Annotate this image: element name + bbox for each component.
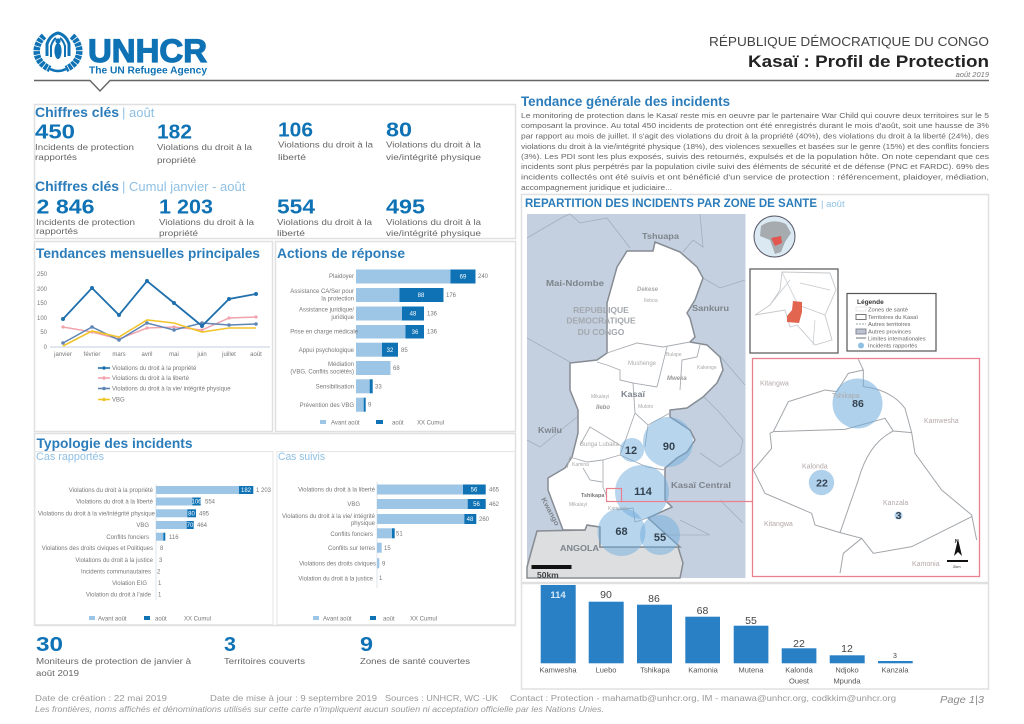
legend: cas rapportés: [89, 616, 211, 622]
bar chart: cas suivis: 56: [473, 502, 480, 508]
line chart: mai: [169, 352, 179, 358]
subheading: cas suivis: Cas suivis: [278, 451, 325, 463]
legend items: Autres territoires: [868, 322, 911, 328]
bar chart: cas rapportés: Incidents communautaires: [81, 570, 151, 576]
values: 3: [893, 653, 897, 660]
stat: 450: Incidents de protection: [35, 142, 134, 152]
bar chart: cas suivis: 260: [479, 517, 490, 523]
map: territory labels: Dekese: [637, 287, 659, 293]
line chart: 100: [37, 316, 48, 322]
map: scale bar: [532, 565, 572, 580]
heading: actions: Actions de réponse: [277, 245, 405, 261]
chart legend: Violations du droit à la liberté: [112, 376, 190, 382]
zone names: Kamwesha: [539, 666, 577, 674]
legend: actions: XX Cumul: [417, 420, 444, 426]
panel: chiffres clés: [34, 104, 516, 238]
stat: 182: Violations du droit à la: [157, 142, 252, 152]
map: bubble values: 114: [634, 486, 653, 498]
title block: [709, 34, 990, 79]
stat: 30: Moniteurs de protection de janvier à: [36, 656, 191, 666]
map: territory labels: Mweka: [667, 376, 687, 382]
panel: tendances mensuelles: [34, 242, 272, 432]
bar chart: cas suivis: Violations des droits civiques: [299, 562, 376, 568]
legend: cas suivis: XX Cumul: [410, 616, 437, 622]
map: province labels: Kwango: [539, 497, 560, 527]
panel: typologie des incidents: [34, 434, 516, 626]
map: country label: REPUBLIQUE: [573, 305, 629, 315]
map: province labels: Kasaï: [621, 389, 646, 399]
bar chart: cas rapportés: Violation du droit à l'aide: [86, 592, 152, 598]
stacked bar chart: (VBG, Conflits sociétés): [290, 370, 354, 376]
zone names: Mpunda: [833, 676, 861, 686]
logo wordmark: UNHCR: [88, 33, 207, 69]
map: province labels: Kasaï Central: [671, 480, 731, 490]
stat: 9: Zones de santé couvertes: [360, 656, 470, 666]
map: bubble values: 12: [625, 445, 637, 457]
map: location box and connector: [606, 488, 752, 502]
inset: zone labels: Kanzala: [883, 500, 908, 507]
legend: cas suivis: août: [383, 616, 395, 622]
map: territory labels: Mikalayi: [569, 502, 587, 508]
stat: 554: liberté: [277, 228, 305, 238]
stat: 3: Territoires couverts: [224, 656, 305, 666]
legend: cas rapportés: août: [155, 616, 167, 622]
bar chart: cas rapportés: Violations des droits civiques et Politiques: [42, 546, 153, 552]
stat: 450: 450: [35, 122, 75, 144]
map legend: [847, 294, 936, 351]
zone names: Kalonda: [785, 666, 814, 674]
map: country label: DU CONGO: [578, 327, 625, 337]
legend items: Incidents rapportés: [868, 344, 917, 350]
bar chart: cas rapportés: Violations du droit à la vie/intégrité physique: [38, 512, 156, 518]
map: territory labels: Mikalayi: [591, 394, 609, 400]
stat: 80: Violations du droit à la: [386, 140, 481, 150]
bar chart: cas suivis: 465: [489, 488, 500, 494]
stat: 2 846: 2 846: [36, 196, 94, 218]
stacked bar chart: 240: [478, 274, 489, 280]
heading: chiffres clés août: Chiffres clés| août: [35, 104, 155, 120]
bar chart: cas rapportés: 80: [188, 512, 195, 518]
paragraph: accompagnement juridique et judiciaire...: [521, 183, 672, 192]
bottom stats: [36, 634, 470, 678]
stat: 106: liberté: [278, 152, 306, 162]
stacked bar chart: Assistance juridique/: [299, 308, 354, 314]
header: UNHCR logo: [37, 33, 207, 76]
stat: 106: [278, 120, 373, 162]
stacked bar chart: Prise en charge médicale: [290, 330, 359, 336]
bar chart: cas suivis: 48: [467, 517, 474, 523]
legend: actions: [320, 420, 444, 426]
bar chart: cas rapportés: 495: [199, 512, 210, 518]
zone names: Ouest: [789, 676, 810, 686]
stacked bar chart: 85: [401, 348, 408, 354]
stat: 106: 106: [278, 120, 313, 142]
bar chart: cas suivis: VBG: [347, 502, 360, 508]
map: territory labels: Tshikapa: [581, 493, 605, 499]
legend: actions: août: [392, 420, 404, 426]
map: territory labels: Mushenge: [628, 361, 657, 367]
stat: 3: 3: [224, 634, 236, 656]
stacked bar chart: Assistance CA/Ser pour: [290, 289, 354, 295]
stacked bar chart: la protection: [321, 296, 354, 302]
values: 55: [745, 615, 757, 627]
line chart: 0: [44, 345, 48, 351]
map: province labels: [538, 231, 731, 553]
bar chart: cas suivis: 9: [382, 562, 386, 568]
zone names: Kamonia: [688, 666, 719, 674]
map: province borders outside Kasaï: [527, 214, 745, 535]
stat: 30: 30: [36, 634, 63, 656]
inset: zone labels: Kalonda: [802, 464, 828, 470]
stat: 182: [157, 122, 252, 165]
chart legend: VBG: [112, 398, 125, 404]
stat: 2 846: [36, 196, 135, 236]
stat: 2 846: rapportés: [36, 226, 78, 236]
stacked bar chart: 36: [412, 330, 419, 336]
bar chart: cas rapportés: 106: [191, 500, 202, 506]
map: province labels: Tshuapa: [642, 231, 679, 241]
legend: cas rapportés: XX Cumul: [184, 616, 211, 622]
map: province labels: ANGOLA: [560, 543, 599, 553]
page number: Page 1|3: [940, 694, 984, 706]
map: bubble values: 68: [615, 526, 628, 538]
heading: tendance générale: Tendance générale des incidents: [521, 93, 730, 109]
map: territory labels: Kakenge: [697, 365, 717, 371]
values: 114: [550, 590, 566, 601]
stacked bar chart: juridique: [330, 315, 355, 321]
map: country label: [566, 305, 636, 337]
footer dates and sources: [35, 693, 896, 703]
bar chart: cas rapportés: 3: [159, 558, 163, 564]
line chart: 150: [37, 301, 48, 307]
bar chart: cas suivis: Violation du droit à la justice: [298, 576, 374, 582]
text block: tendance générale: [521, 93, 989, 192]
line chart: janvier: [53, 352, 72, 358]
map: territory labels: Ilebo: [596, 405, 610, 411]
paragraph: Le monitoring de protection dans le Kasaï reste mis en oeuvre par le partenaire War Child qui couvre deux territoires sur le 5: [521, 111, 989, 120]
paragraph: violations du droit à la vie/intégrité physique (18%), des violences sexuelles et basées sur le genre (15%) et des conflits fonciers: [521, 142, 989, 151]
map: territory labels: Mutoto: [638, 404, 654, 410]
map: bubble values: 55: [654, 532, 666, 544]
line chart: juin: [196, 352, 207, 358]
line chart: mars: [112, 352, 126, 358]
paragraph: (3%). Les PDI sont les plus exposés, suivis des retournés, expulsés et de la population hôte. On note cependant que ces: [521, 152, 989, 161]
stat: 554: Violations du droit à la: [277, 217, 372, 227]
bar chart: cas rapportés: 1: [158, 581, 162, 587]
zone names: Tshikapa: [640, 666, 671, 674]
stat: 495: vie/intégrité physique: [386, 228, 481, 238]
stacked bar chart: 48: [410, 312, 417, 318]
footer disclaimer: Les frontières, noms affichés et dénominations utilisés sur cette carte n'impliquent aucun soutien ni acceptation officielle par les Nations Unies.: [35, 704, 604, 714]
chart legend: Violations du droit à la propriété: [112, 366, 197, 372]
stat: 554: 554: [277, 196, 316, 218]
map: scale bar: 50km: [537, 570, 559, 580]
bar chart: cas rapportés: Violations du droit à la justice: [75, 558, 154, 564]
icon: UNHCR emblem: [37, 33, 79, 71]
heading: typologie: Typologie des incidents: [36, 435, 193, 451]
legend: cas rapportés: Avant août: [98, 616, 127, 622]
bar chart: cas suivis: physique: [351, 521, 376, 527]
stat: 3: [224, 634, 305, 666]
chart legend: [98, 366, 231, 404]
panel: actions de réponse: [276, 242, 516, 432]
zone names: Kanzala: [881, 666, 909, 674]
bar chart: cas rapportés: Violation EIG: [112, 581, 147, 587]
stat: 2 846: Incidents de protection: [36, 217, 135, 227]
values: 22: [793, 638, 805, 650]
bar chart: cas rapportés: Violations du droit à la propriété: [69, 488, 154, 494]
bar chart: cas suivis: Violations du droit à la liberté: [298, 488, 376, 494]
zone names: Ndjoko: [835, 666, 859, 674]
legend items: Territoires du Kasaï: [868, 315, 918, 321]
map: province labels: Sankuru: [692, 303, 729, 313]
footer dates and sources: Contact : Protection - mahamatb@unhcr.org, IM - manawa@unhcr.org, codkkim@unhcr.org: [510, 693, 896, 703]
stat: 450: [35, 122, 134, 162]
map: territory labels: [569, 287, 717, 512]
inset map: zoom on Tshikapa: [752, 358, 980, 576]
stat: 495: [386, 196, 481, 238]
values: 68: [697, 605, 708, 617]
panel: cas rapportés: [35, 451, 273, 624]
zone names: [539, 666, 909, 686]
legend items: Limites internationales: [868, 336, 926, 342]
stacked bar chart: 88: [418, 293, 425, 299]
inset: zone labels: Tshikapa: [832, 393, 860, 400]
stat: 30: août 2019: [36, 668, 79, 678]
map: country label: DEMOCRATIQUE: [566, 316, 636, 326]
stat: 106: Violations du droit à la: [278, 140, 373, 150]
stat: 1 203: 1 203: [159, 196, 213, 218]
panel: cas suivis: [277, 451, 515, 624]
stacked bar chart: 32: [387, 348, 394, 354]
stat: 80: [386, 120, 481, 162]
icon: north arrow and scale: 2km: [953, 564, 961, 569]
panel: carte répartition des incidents: [522, 194, 988, 582]
bar chart: cas suivis: 51: [396, 532, 403, 538]
inset: boundaries: [753, 359, 977, 573]
header rule with notch: [34, 80, 989, 91]
values: 12: [841, 643, 853, 655]
map: territory labels: Bulape: [666, 352, 682, 358]
line chart: août: [250, 352, 262, 358]
stacked bar chart: 136: [427, 312, 438, 318]
inset: zone labels: Kitangwa: [764, 521, 793, 528]
map: Angola: [527, 525, 683, 578]
map: province labels: Kwilu: [538, 425, 562, 435]
bar chart: cas rapportés: 70: [187, 523, 194, 529]
inset: values: [816, 398, 902, 522]
bar chart: cas rapportés: 554: [205, 500, 216, 506]
heading: chiffres clés cumul: Chiffres clés| Cumul janvier - août: [35, 178, 246, 194]
stacked bar chart: Plaidoyer: [329, 274, 354, 280]
bars: [541, 585, 913, 663]
line chart: février: [84, 352, 100, 358]
stacked bar chart: Médiation: [328, 362, 354, 368]
stat: 495: Violations du droit à la: [386, 217, 481, 227]
stacked bar chart: 69: [460, 274, 467, 280]
stat: 1 203: propriété: [159, 228, 198, 238]
line chart: [37, 272, 270, 358]
country title: RÉPUBLIQUE DÉMOCRATIQUE DU CONGO: [709, 34, 989, 49]
stat: 1 203: [159, 196, 254, 238]
stat: 9: [360, 634, 470, 666]
bar chart: cas rapportés: VBG: [136, 523, 149, 529]
bar chart: cas suivis: 462: [489, 502, 500, 508]
stat: 80: 80: [386, 120, 412, 142]
inset: bubbles: [809, 378, 902, 520]
inset: values: 86: [852, 398, 864, 410]
map: territory labels: Kamonia: [608, 506, 628, 512]
line chart: 50: [40, 330, 48, 336]
stacked bar chart: Appui psychologique: [299, 348, 355, 354]
inset: zone labels: [760, 380, 959, 568]
bar chart: cas rapportés: Violations du droit à la liberté: [76, 500, 154, 506]
map: bubble values: 90: [663, 441, 675, 453]
footer dates and sources: Sources : UNHCR, WC -UK: [385, 693, 498, 703]
footer dates and sources: Date de création : 22 mai 2019: [35, 693, 167, 703]
stat: 9: 9: [360, 634, 373, 656]
stacked bar chart: 68: [393, 366, 400, 372]
stacked bar chart: Prévention des VBG: [300, 403, 354, 409]
stacked bar chart: Sensibilisation: [316, 384, 354, 390]
icon: globe locator: [754, 216, 795, 257]
legend: actions: Avant août: [331, 420, 360, 426]
stacked bar chart: [290, 270, 489, 412]
values: 90: [600, 589, 612, 601]
footer: [35, 693, 984, 714]
bar chart: cas suivis: 15: [384, 546, 391, 552]
map: territory labels: Bunga Lubaka: [580, 442, 619, 448]
paragraph: incidents sont plus perpétrés par la population civile suivi des éléments de sécurité et de défense (PNC et FARDC). 69% des: [521, 162, 989, 171]
map: health-zone borders: [567, 342, 700, 522]
bar chart: cas rapportés: 8: [160, 546, 164, 552]
panel: bar chart incidents par zone: [522, 584, 988, 689]
icon: north arrow and scale: N: [955, 539, 959, 545]
line chart: juillet: [221, 352, 236, 358]
stat: 1 203: Violations du droit à la: [159, 217, 254, 227]
stat: 495: 495: [386, 196, 425, 218]
bar chart: cas suivis: 1: [379, 576, 383, 582]
map: bubble values: [615, 441, 675, 544]
paragraph: composant la province. Au total 450 incidents de protection ont été enregistrés durant le mois d'août, soit une hausse de 3%: [521, 121, 989, 130]
stat: 554: [277, 196, 372, 238]
inset: zone labels: Kitangwa: [760, 380, 789, 388]
footer dates and sources: Date de mise à jour : 9 septembre 2019: [210, 693, 377, 703]
map: Kasaï province white area: [548, 242, 723, 547]
zone names: Luebo: [596, 666, 616, 674]
logo tagline: The UN Refugee Agency: [89, 66, 207, 76]
legend title: Légende: [857, 299, 884, 306]
paragraph: par rapport au mois de juillet. Il s'agit des violations du droit à la propriété (40%), des violations du droit à la liberté (24%), des: [521, 132, 989, 140]
stat: 30: [36, 634, 191, 678]
main map: [527, 214, 752, 580]
map: territory labels: Ileboa: [644, 298, 658, 304]
stacked bar chart: 9: [368, 402, 372, 408]
stat: 182: 182: [157, 122, 192, 144]
inset: zone labels: Kamonia: [912, 561, 940, 568]
inset map: RDC locator: [750, 269, 838, 353]
stacked bar chart: 136: [427, 330, 438, 336]
bar chart: cas suivis: 56: [471, 488, 478, 494]
stat: 182: propriété: [157, 155, 196, 165]
legend: cas suivis: [313, 616, 437, 622]
stat: 80: vie/intégrité physique: [386, 152, 481, 162]
legend items: Autres provinces: [868, 330, 911, 336]
bar chart: cas rapportés: 464: [197, 523, 208, 529]
map: province labels: Mai-Ndombe: [546, 278, 604, 288]
main title: Kasaï : Profil de Protection: [748, 52, 989, 71]
stat: 450: rapportés: [35, 152, 77, 162]
chart legend: Violations du droit à la vie/ intégrité physique: [112, 386, 231, 392]
icon: north arrow and scale: [947, 539, 968, 569]
map: bubbles: [598, 417, 693, 556]
inset: values: 22: [816, 478, 828, 490]
legend: cas suivis: Avant août: [323, 616, 352, 622]
bar chart: cas rapportés: [38, 484, 272, 600]
legend items: Zones de santé: [868, 308, 908, 314]
heading: tendances: Tendances mensuelles principales: [36, 245, 260, 261]
inset: zone labels: Kamwesha: [924, 418, 959, 425]
paragraph: [521, 111, 989, 192]
stacked bar chart: 33: [375, 384, 382, 390]
heading: répartition: REPARTITION DES INCIDENTS PAR ZONE DE SANTE | août: [525, 198, 845, 210]
bar chart: cas suivis: Violations du droit à la vie/ intégrité: [282, 514, 376, 520]
bar chart: cas rapportés: 1: [158, 592, 162, 598]
inset: values: 3: [896, 510, 902, 522]
subheading: cas rapportés: Cas rapportés: [36, 451, 104, 463]
stacked bar chart: 176: [446, 293, 457, 299]
values: 86: [648, 593, 660, 605]
legend items: [856, 307, 926, 350]
line chart: 250: [37, 272, 48, 278]
line chart: 200: [37, 287, 48, 293]
values: [550, 589, 897, 660]
bar chart: cas rapportés: Conflits fonciers: [106, 535, 149, 541]
zone names: Mutena: [738, 666, 764, 674]
line chart: avril: [141, 352, 153, 358]
date: août 2019: [956, 70, 990, 79]
bar chart: cas rapportés: 116: [169, 535, 179, 541]
bar chart: cas suivis: Conflits sur terres: [328, 546, 375, 552]
bar chart: cas rapportés: 1 203: [256, 488, 272, 494]
map: territory labels: Kamina: [572, 462, 589, 468]
bar chart: cas rapportés: 2: [157, 570, 161, 576]
paragraph: incidents collectés ont été suivis et ont bénéficié d'un service de protection : référencement, plaidoyer, médiation,: [521, 172, 989, 182]
bar chart: cas suivis: [282, 482, 500, 588]
bar chart: cas rapportés: 182: [241, 488, 252, 494]
bar chart: cas suivis: Conflits fonciers: [330, 532, 373, 538]
